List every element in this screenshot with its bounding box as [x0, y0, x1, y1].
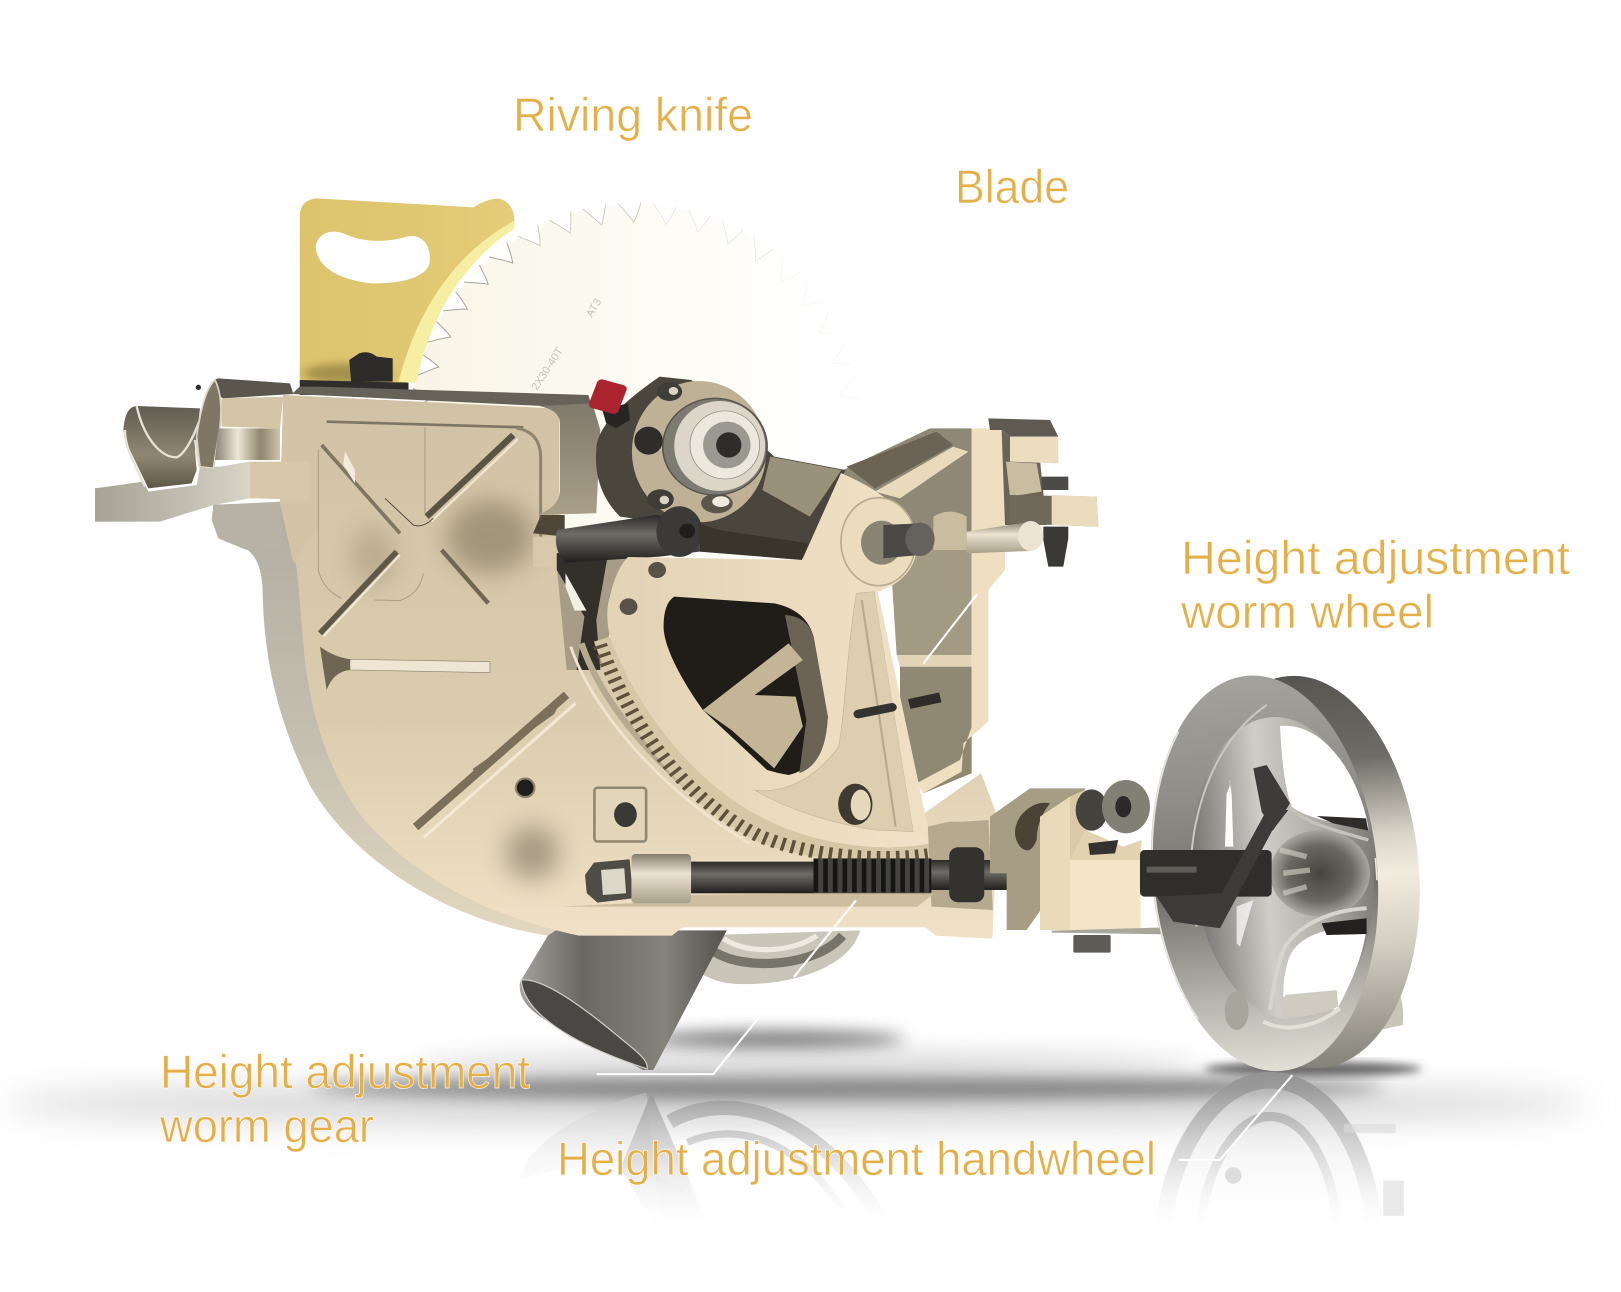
- blade gullets faint: [770, 257, 860, 402]
- lower flange bolt: [647, 489, 674, 509]
- dark mechanism link: [557, 553, 608, 670]
- lower flange slot: [701, 493, 733, 513]
- blade gullets right side: [651, 203, 773, 265]
- top-left panel rib: [322, 445, 400, 533]
- lower window: [1283, 925, 1367, 1010]
- blade engraving: [529, 297, 604, 393]
- housing X recess: [318, 422, 560, 770]
- roller cylinder: [556, 515, 699, 563]
- lower-right panel rib: [442, 550, 488, 603]
- worm core: [814, 858, 931, 893]
- red cap: [588, 378, 628, 415]
- tan hub block: [762, 457, 841, 517]
- cam bolt: [1115, 796, 1131, 817]
- right bracket: [843, 418, 1098, 793]
- label: height adjustment worm gear: worm gear: [159, 1099, 374, 1152]
- pivot collar: [861, 521, 902, 565]
- recess shadow right: [447, 500, 533, 573]
- riving knife: [300, 198, 514, 395]
- top-right panel rib highlight: [431, 439, 518, 521]
- hub: [1270, 830, 1370, 917]
- block upper right: [1070, 830, 1142, 860]
- upper edge tip: [385, 498, 433, 526]
- knife slot: [316, 232, 430, 283]
- blade gullets top: [517, 203, 641, 253]
- block left face: [1040, 797, 1070, 930]
- arm recess: [755, 592, 914, 832]
- bracket web bar: [897, 655, 972, 667]
- arm recess ridge: [862, 600, 896, 827]
- worm drive: [560, 847, 1039, 907]
- lower rim curve: [1263, 1008, 1340, 1027]
- outer washer: [674, 401, 765, 491]
- hex head: [601, 868, 626, 895]
- leader worm gear lower: [597, 1016, 760, 1074]
- lower-left panel rib: [320, 552, 397, 633]
- block front face: [1070, 860, 1141, 930]
- blade disc: [411, 205, 860, 653]
- blade gullets left side: [409, 243, 518, 414]
- top grey strip: [292, 387, 598, 430]
- outer ring shadow: [581, 643, 753, 833]
- label: height adjustment worm gear: Height adjustment: [160, 1045, 530, 1098]
- label: riving knife: Riving knife: [513, 88, 753, 141]
- lower-left rib highlight: [323, 555, 400, 637]
- housing body: [280, 395, 998, 939]
- lock nut: [949, 847, 984, 902]
- upper dark shaft: [1317, 816, 1368, 831]
- cam wheel: [1102, 780, 1150, 833]
- mount plate: [594, 788, 646, 842]
- hub flange: [632, 381, 766, 522]
- lower dark shaft: [1322, 918, 1367, 935]
- plate hole lower: [620, 598, 637, 615]
- block top ridge: [1070, 790, 1090, 860]
- shiny tube section: [215, 428, 280, 460]
- tube two opening: [197, 380, 221, 468]
- pivot shaft end: [905, 523, 935, 556]
- clamp block: [250, 462, 310, 500]
- upper flange bolt: [657, 382, 682, 401]
- cone body: [520, 930, 727, 1070]
- rear handle: [1380, 990, 1403, 1030]
- pin end: [1018, 521, 1043, 551]
- pivot shaft: [883, 523, 920, 558]
- red cap holder: [602, 403, 630, 428]
- mid washer: [690, 411, 760, 479]
- window beige web: [703, 643, 803, 768]
- leader worm wheel: [923, 594, 977, 664]
- bolt hex: [585, 859, 633, 903]
- top recess edge: [327, 422, 523, 427]
- dark bracket arm lower: [1157, 810, 1288, 928]
- pivot ring: [841, 498, 916, 586]
- diagonal rib highlight: [424, 703, 576, 837]
- beige support: [533, 537, 557, 567]
- bracket lit cutout: [933, 512, 967, 550]
- blade engraving: 2X30-40T: [529, 345, 566, 393]
- block dark recess: [1088, 840, 1118, 855]
- rim outer face: [1174, 666, 1436, 1078]
- window: [664, 597, 828, 775]
- left window: [1225, 780, 1233, 847]
- side block light: [1052, 495, 1098, 527]
- right recess edge: [517, 428, 541, 560]
- rib corner shadow: [320, 647, 350, 690]
- bracket dark rib gap: [847, 432, 953, 488]
- dust port cone: [520, 930, 727, 1070]
- lower right bracket: [928, 820, 993, 910]
- arm recess raised strip: [874, 592, 931, 843]
- floor shadow: [0, 1031, 1592, 1125]
- bracket rib panel: [843, 428, 972, 553]
- upper bolt: [1042, 477, 1068, 490]
- label: height adjustment worm wheel: worm wheel: [1180, 585, 1434, 638]
- rail arm: [95, 462, 250, 522]
- drive block: [990, 780, 1213, 953]
- base plate: [1052, 926, 1213, 935]
- rim bright inner edge: [1136, 667, 1393, 1080]
- lower bolt: [1043, 527, 1068, 567]
- rear pin: [909, 697, 940, 704]
- housing side face: [537, 403, 600, 515]
- window side rib: [785, 615, 828, 773]
- lower window handle: [1285, 990, 1338, 1017]
- cone mouth: [521, 980, 647, 1069]
- tube one: [123, 406, 200, 488]
- hub highlights: [1280, 850, 1310, 893]
- cam wheel hub: [1076, 789, 1108, 831]
- dark hub body: [596, 377, 845, 560]
- outer ring arc: [571, 647, 749, 843]
- rim knob: [1225, 991, 1249, 1030]
- lower spoke edge: [1270, 908, 1367, 1010]
- shadow blotch: [506, 826, 559, 880]
- label: height adjustment handwheel: Height adjustment handwheel: [557, 1132, 1156, 1185]
- knife clamp bar: [300, 380, 409, 395]
- block slot: [1015, 803, 1050, 850]
- dark wedge block: [533, 515, 565, 537]
- worm threads: [814, 826, 931, 926]
- housing rim: [213, 503, 579, 936]
- drive shaft: [931, 860, 1039, 890]
- lower pulley: [693, 930, 860, 984]
- steel pin: [967, 522, 1031, 553]
- beige tube section: [222, 397, 283, 428]
- top-left bright facet: [343, 452, 355, 483]
- upper spoke edge: [1290, 808, 1368, 840]
- lower arc seam: [318, 450, 423, 601]
- label: height adjustment worm wheel: Height adjustment: [1181, 531, 1570, 584]
- top-right panel rib: [427, 435, 513, 517]
- spindle nut: [716, 432, 741, 458]
- blade engraving: AT3: [584, 297, 604, 320]
- pivot bolt: [841, 498, 935, 586]
- block back: [990, 788, 1085, 930]
- under shaft base: [560, 893, 935, 907]
- horizontal rib: [350, 659, 490, 673]
- plate lower hole: [838, 784, 872, 825]
- upper window: [1280, 726, 1368, 831]
- bracket light rib: [875, 447, 968, 498]
- lower recess line: [473, 700, 560, 770]
- bracket back panel lower: [900, 667, 972, 793]
- inner bearing: [703, 422, 751, 468]
- roller hex socket: [679, 524, 695, 538]
- knife shadow: [304, 363, 391, 383]
- top block dark face: [988, 418, 1058, 437]
- collar: [631, 854, 691, 903]
- mount plate bolt: [614, 802, 637, 827]
- top block lower: [1006, 462, 1042, 497]
- rack teeth: [600, 645, 928, 858]
- knife light edge: [399, 221, 514, 383]
- middle flange bolt: [634, 427, 663, 455]
- plate hole upper: [648, 562, 666, 578]
- knife plate: [300, 198, 514, 384]
- rail underside: [212, 502, 282, 550]
- bracket back panel upper: [890, 550, 972, 655]
- blade: [409, 203, 860, 653]
- leader worm gear upper: [794, 900, 856, 977]
- dish: [1180, 709, 1386, 1027]
- gear sector plate: [607, 473, 931, 847]
- floor reflection: [520, 1072, 1404, 1235]
- top block front: [1010, 437, 1058, 463]
- lower left window: [1237, 900, 1253, 947]
- white gap: [565, 573, 586, 611]
- leader lines: [597, 594, 1292, 1160]
- small dot: [196, 385, 201, 390]
- gear sector: [571, 473, 993, 910]
- front pin: [858, 707, 892, 714]
- tube two top: [208, 378, 293, 398]
- housing hole: [516, 778, 534, 797]
- mechanism shadow wedge: [699, 523, 808, 560]
- tan mechanism backing: [557, 553, 632, 670]
- lead shaft: [691, 862, 814, 893]
- shaft: [1140, 850, 1272, 897]
- roller end cap: [656, 506, 702, 557]
- bracket column: [917, 428, 1005, 793]
- diagonal rib: [416, 695, 567, 827]
- housing front face left strip: [280, 395, 320, 563]
- shaft highlight: [1147, 867, 1197, 873]
- recess shadow centre: [350, 527, 397, 587]
- rim groove: [1191, 705, 1267, 927]
- knife clamp bolt: [349, 352, 393, 382]
- gear band: [594, 637, 931, 862]
- blade hub assembly: [292, 377, 845, 670]
- rail and tubes: [95, 378, 320, 563]
- handwheel: [1135, 666, 1436, 1081]
- dark bracket arm upper: [1253, 765, 1290, 830]
- side block dark: [1010, 495, 1098, 527]
- knurled flange ring: [663, 398, 767, 495]
- center vertical seam: [423, 427, 426, 513]
- label: blade: Blade: [955, 160, 1069, 213]
- rim front ring: [1135, 666, 1394, 1081]
- dark backing block: [1002, 430, 1047, 525]
- tube one highlight: [125, 406, 203, 487]
- lower housing details: [416, 695, 646, 880]
- leader handwheel: [1179, 1075, 1292, 1160]
- base bolts: [1073, 935, 1111, 953]
